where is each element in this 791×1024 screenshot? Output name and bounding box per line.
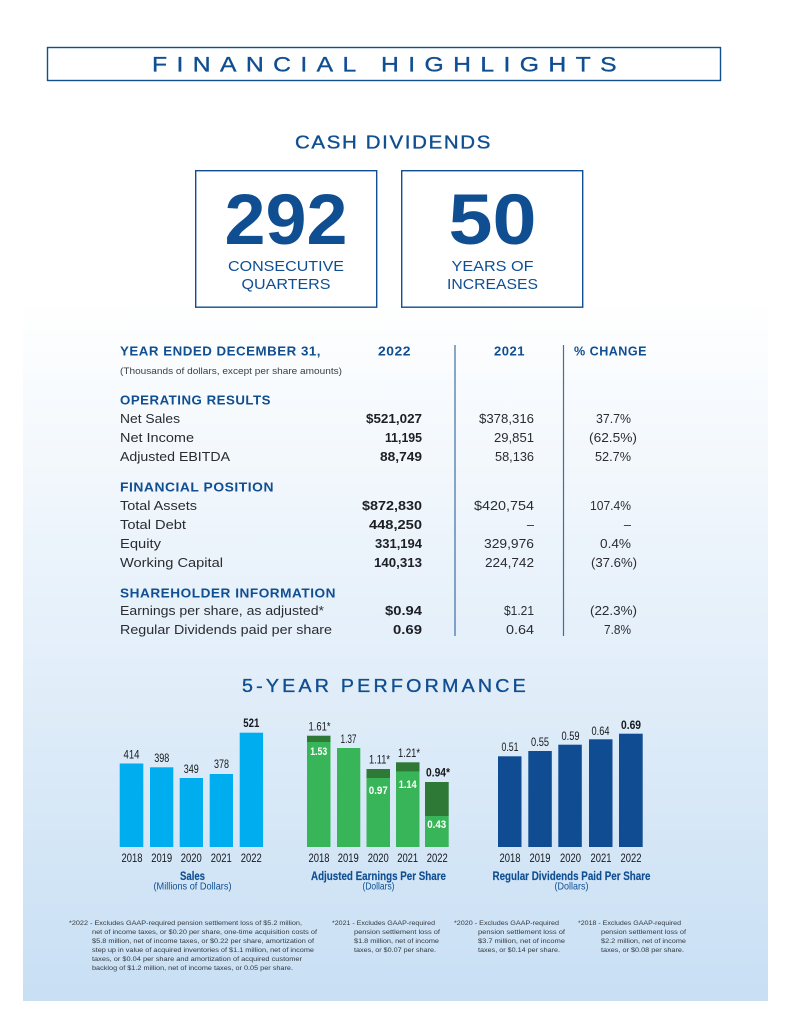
sales years: 2022: [241, 851, 262, 865]
sales years: 2019: [151, 851, 172, 865]
sales value labels: 398: [154, 753, 169, 765]
earnings value labels: 0.94*: [426, 768, 450, 780]
title banner: FINANCIAL HIGHLIGHTS: [152, 54, 626, 76]
section: financial position: Total Debt: [120, 517, 186, 532]
earnings value labels: 0.97: [369, 785, 388, 797]
dividend caption: Regular Dividends Paid Per Share: [492, 869, 651, 883]
heading: cash dividends: CASH DIVIDENDS: [295, 132, 492, 152]
section: operating results: [120, 392, 637, 464]
section: financial position: Working Capital: [120, 555, 223, 570]
footnote: 2018: *2018 - Excludes GAAP-required: [578, 920, 681, 927]
sales years: 2020: [181, 851, 202, 865]
section: shareholder information: [120, 586, 637, 637]
heading: 5-year performance: 5-YEAR PERFORMANCE: [242, 675, 529, 696]
sales caption: (Millions of Dollars): [154, 882, 232, 892]
section: operating results: 88,749: [380, 449, 422, 464]
footnote: 2022: backlog of $1.2 million, net of income taxes, or 0.05 per share.: [92, 965, 293, 972]
footnote: 2020: $3.7 million, net of income: [478, 938, 565, 945]
footnote: 2021: $1.8 million, net of income: [354, 938, 439, 945]
footnote: 2022: $5.8 million, net of income taxes, or $0.22 per share, amortization of: [92, 938, 314, 945]
stat box: 50 years of increases: YEARS OF: [452, 258, 534, 275]
section: financial position: 140,313: [374, 555, 422, 570]
section: shareholder information: Regular Dividends paid per share: [120, 622, 332, 637]
earnings value labels: 1.21*: [398, 748, 420, 760]
dividend years: 2019: [530, 851, 551, 865]
dark green bar segments: [307, 736, 449, 816]
sales years: [122, 851, 262, 865]
section: financial position: $872,830: [362, 498, 422, 513]
sales value labels: 378: [214, 759, 229, 771]
section: operating results: 58,136: [495, 449, 534, 464]
section: financial position: Equity: [120, 536, 162, 551]
footnote: 2022: [69, 920, 317, 972]
sales value labels: 414: [124, 750, 140, 762]
section: shareholder information: 7.8%: [604, 622, 631, 637]
earnings years: 2021: [397, 851, 418, 865]
section: operating results: $378,316: [479, 411, 534, 426]
section: operating results: Net Income: [120, 430, 194, 445]
earnings value labels: 1.37: [340, 734, 356, 746]
section: financial position: 331,194: [375, 536, 423, 551]
section: shareholder information: SHAREHOLDER INFORMATION: [120, 586, 336, 600]
earnings caption: [311, 869, 446, 892]
dividend years: [500, 851, 642, 865]
footnote: 2021: pension settlement loss of: [354, 929, 440, 936]
section: financial position: (37.6%): [591, 555, 637, 570]
chart: adjusted earnings per share: [307, 722, 450, 892]
earnings years: 2018: [308, 851, 330, 865]
section: shareholder information: 0.69: [393, 622, 422, 637]
footnote: 2018: [578, 920, 686, 954]
footnote: 2018: pension settlement loss of: [601, 929, 686, 936]
background gradient panel: [23, 300, 768, 1001]
table header: 2021: [494, 344, 525, 358]
sales bars: [120, 733, 263, 847]
section: operating results: (62.5%): [589, 430, 637, 445]
footnote: 2022: net of income taxes, or $0.20 per share, one-time acquisition costs of: [92, 929, 317, 936]
section: financial position: –: [624, 517, 632, 532]
section: financial position: FINANCIAL POSITION: [120, 480, 274, 494]
section: operating results: 52.7%: [595, 449, 631, 464]
earnings value labels: 1.11*: [369, 754, 390, 766]
dividend bars: [498, 734, 643, 847]
footnote: 2020: [454, 920, 565, 954]
section: financial position: Total Assets: [120, 498, 197, 513]
section: financial position: 224,742: [485, 555, 534, 570]
section: operating results: 11,195: [385, 430, 422, 445]
earnings value labels: 0.43: [427, 819, 446, 831]
dividend value labels: 0.51: [502, 742, 518, 754]
footnote: 2020: taxes, or $0.14 per share.: [478, 947, 560, 954]
sales caption: Sales: [180, 869, 205, 883]
table header: % CHANGE: [574, 344, 647, 358]
chart: regular dividends paid per share: [492, 720, 651, 892]
sales value labels: 521: [243, 718, 260, 730]
light green bars: [307, 742, 449, 847]
dividend value labels: 0.55: [531, 737, 549, 749]
table header: 2022: [378, 344, 411, 358]
dividend years: 2020: [560, 851, 581, 865]
stat box: 292 consecutive quarters: CONSECUTIVE: [228, 258, 344, 275]
section: financial position: 329,976: [484, 536, 534, 551]
section: operating results: OPERATING RESULTS: [120, 392, 271, 408]
stat box: 50 years of increases: 50: [448, 181, 536, 260]
footnote: 2021: taxes, or $0.07 per share.: [354, 947, 436, 954]
stat box: 292 consecutive quarters: 292: [224, 181, 348, 260]
sales value labels: [124, 718, 260, 776]
section: financial position: –: [527, 517, 535, 532]
section: financial position: 0.4%: [600, 536, 631, 551]
footnote: 2022: taxes, or $0.04 per share and amortization of acquired customer: [92, 956, 303, 963]
dividend value labels: 0.69: [621, 720, 641, 732]
table header: [120, 344, 647, 376]
sales caption: [154, 869, 232, 892]
dividend value labels: [502, 720, 641, 754]
section: shareholder information: (22.3%): [590, 603, 637, 618]
stat box: 50 years of increases: INCREASES: [447, 276, 538, 293]
dividend years: 2021: [590, 851, 612, 865]
financial table: [120, 344, 647, 637]
title banner: [48, 48, 720, 80]
footnote: 2020: pension settlement loss of: [478, 929, 565, 936]
section: operating results: 37.7%: [596, 411, 631, 426]
earnings years: 2019: [338, 851, 359, 865]
section: financial position: $420,754: [474, 498, 534, 513]
section: shareholder information: 0.64: [506, 622, 534, 637]
dividend value labels: 0.64: [592, 726, 610, 738]
dividend value labels: 0.59: [562, 731, 580, 743]
earnings years: 2022: [427, 851, 448, 865]
earnings value labels: 1.14: [399, 779, 417, 791]
stat box: 50 years of increases: [402, 171, 583, 307]
footnote: 2018: taxes, or $0.08 per share.: [601, 947, 684, 954]
section: operating results: $521,027: [366, 411, 422, 426]
table header: (Thousands of dollars, except per share amounts): [120, 366, 342, 376]
table header: YEAR ENDED DECEMBER 31,: [120, 344, 321, 358]
footnote: 2021: [332, 920, 440, 954]
stat box: 292 consecutive quarters: [196, 171, 377, 307]
chart: sales: [120, 718, 263, 892]
earnings caption: (Dollars): [362, 882, 394, 892]
sales years: 2021: [211, 851, 232, 865]
footnote: 2022: step up in value of acquired inventories of $1.1 million, net of income: [92, 947, 314, 954]
dividend caption: (Dollars): [554, 882, 588, 892]
section: shareholder information: Earnings per share, as adjusted*: [120, 603, 324, 618]
earnings value labels: 1.53: [310, 746, 327, 758]
footnote: 2021: *2021 - Excludes GAAP-required: [332, 920, 435, 927]
footnote: 2022: *2022 - Excludes GAAP-required pension settlement loss of $5.2 million,: [69, 920, 302, 927]
sales value labels: 349: [184, 764, 199, 776]
earnings years: [308, 851, 448, 865]
section: financial position: [120, 480, 637, 570]
dividend years: 2018: [500, 851, 521, 865]
sales years: 2018: [122, 851, 143, 865]
dividend caption: [492, 869, 651, 892]
section: financial position: 448,250: [369, 517, 422, 532]
section: financial position: 107.4%: [590, 498, 631, 513]
section: operating results: 29,851: [494, 430, 534, 445]
dividend years: 2022: [620, 851, 642, 865]
section: operating results: Adjusted EBITDA: [120, 449, 231, 464]
section: operating results: Net Sales: [120, 411, 180, 426]
stat box: 292 consecutive quarters: QUARTERS: [242, 276, 330, 293]
earnings years: 2020: [368, 851, 389, 865]
footnote: 2020: *2020 - Excludes GAAP-required: [454, 920, 559, 927]
earnings value labels: [308, 722, 450, 831]
earnings caption: Adjusted Earnings Per Share: [311, 869, 446, 883]
footnote: 2018: $2.2 million, net of income: [601, 938, 686, 945]
earnings value labels: 1.61*: [308, 722, 331, 734]
section: shareholder information: $1.21: [504, 603, 534, 618]
section: shareholder information: $0.94: [385, 603, 423, 618]
